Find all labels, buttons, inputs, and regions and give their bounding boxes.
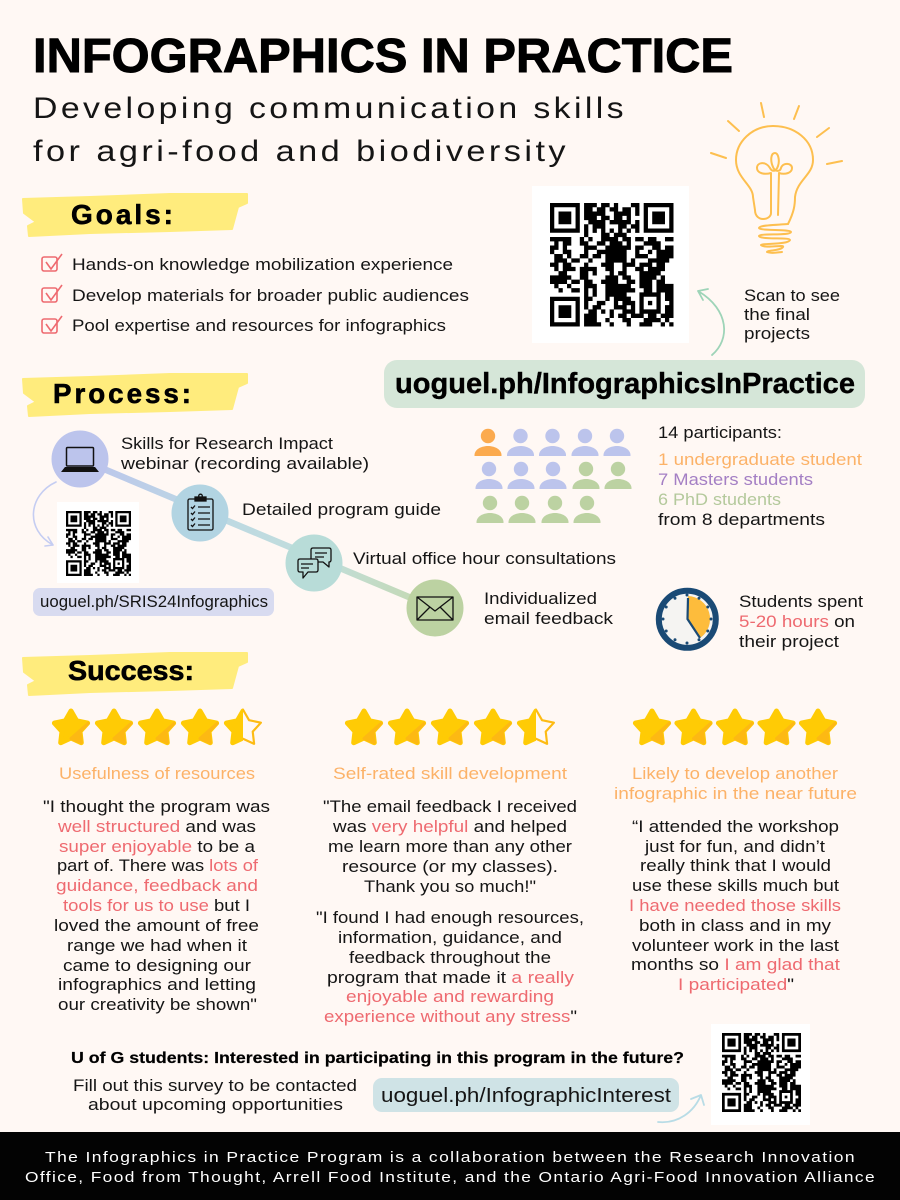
- rating: 4.5 stars: [54, 710, 261, 744]
- quote: "I thought the program was: [43, 797, 270, 816]
- quote: loved the amount of free: [54, 916, 259, 935]
- subtitle: Developing communication skills: [33, 92, 627, 125]
- QR code: final projects: [532, 186, 689, 343]
- quote 2: [316, 908, 584, 1026]
- icon: light bulb: [711, 103, 842, 253]
- quote: months so I am glad that: [631, 955, 840, 974]
- step 4: email feedback: email feedback: [484, 609, 614, 628]
- quote: guidance, feedback and: [56, 876, 258, 895]
- footer band: [0, 1132, 900, 1200]
- quote: came to designing our: [63, 956, 251, 975]
- url pill: interest survey: [373, 1078, 679, 1112]
- icon: chat bubbles: [298, 548, 331, 578]
- participant counts: [658, 423, 862, 529]
- quote 1: Thank you so much!": [364, 877, 536, 896]
- quote: I have needed those skills: [629, 896, 841, 915]
- quote: range we had when it: [67, 936, 247, 955]
- people icons: [474, 429, 632, 523]
- caption: scan to see the final projects: projects: [744, 324, 810, 343]
- time text: [739, 592, 863, 651]
- success brush highlight: [23, 653, 247, 695]
- call to action text: [73, 1076, 357, 1114]
- title: INFOGRAPHICS IN PRACTICE: [33, 30, 733, 83]
- time text: 5-20 hours on: [739, 612, 855, 631]
- quote 2: feedback throughout the: [349, 948, 551, 967]
- quote 1: was very helpful and helped: [332, 817, 567, 836]
- quote 1: "The email feedback I received: [323, 797, 577, 816]
- quote 2: "I found I had enough resources,: [316, 908, 584, 927]
- rating label: Usefulness of resources: [59, 764, 255, 783]
- quote: “I attended the workshop: [632, 817, 839, 836]
- goal 1: Hands-on knowledge mobilization experience: [72, 255, 453, 274]
- caption: scan to see the final projects: Scan to see: [744, 286, 840, 305]
- arrow: to survey QR: [658, 1095, 704, 1122]
- quote: part of. There was lots of: [57, 856, 258, 875]
- step 2: program guide: [172, 484, 441, 542]
- url pill: main: [384, 360, 865, 408]
- QR code: webinar: [57, 502, 139, 583]
- icon: clock: [659, 591, 716, 648]
- call to action text: about upcoming opportunities: [88, 1095, 343, 1114]
- quote: tools for us to use but I: [63, 896, 250, 915]
- quote 1: me learn more than any other: [328, 837, 572, 856]
- column: usefulness of resources: [43, 710, 270, 1014]
- time text: their project: [739, 632, 839, 651]
- quote: use these skills much but: [632, 876, 839, 895]
- participant counts: from 8 departments: [658, 510, 825, 529]
- time text: Students spent: [739, 592, 863, 611]
- url pill: webinar: [33, 588, 274, 616]
- rating label: Likely to develop another: [632, 764, 838, 783]
- subtitle: [33, 92, 627, 168]
- icon: clipboard: [188, 494, 213, 530]
- quote: super enjoyable to be a: [59, 837, 256, 856]
- step 2: program guide: Detailed program guide: [242, 500, 441, 519]
- step 1: webinar: Skills for Research Impact: [121, 434, 333, 453]
- heading: success: Success:: [68, 655, 194, 686]
- quote: both in class and in my: [639, 916, 832, 935]
- column: self-rated skill development: [316, 710, 584, 1026]
- step 1: webinar: [52, 430, 369, 488]
- caption: scan to see the final projects: [744, 286, 840, 343]
- participant counts: 1 undergraduate student: [658, 450, 862, 469]
- quote 2: program that made it a really: [327, 968, 575, 987]
- column: likely to develop another: [614, 711, 857, 994]
- panel: participants: [474, 423, 862, 529]
- subtitle: for agri-food and biodiversity: [33, 135, 569, 168]
- rating: 5 stars: [635, 711, 835, 743]
- panel: call to action: [71, 1024, 810, 1125]
- rating label: infographic in the near future: [614, 784, 857, 803]
- heading: goals: Goals:: [71, 199, 176, 230]
- url pill: interest survey: uoguel.ph/InfographicInterest: [381, 1085, 671, 1107]
- participant counts: 6 PhD students: [658, 490, 781, 509]
- goal 2: Develop materials for broader public audiences: [72, 286, 469, 305]
- quote: just for fun, and didn’t: [644, 837, 825, 856]
- step 4: email feedback: Individualized: [484, 589, 597, 608]
- quote: volunteer work in the last: [632, 936, 839, 955]
- quote: [43, 797, 270, 1014]
- quote 2: enjoyable and rewarding: [346, 987, 554, 1006]
- goals brush highlight: [23, 194, 247, 236]
- quote: really think that I would: [640, 856, 831, 875]
- step 3: office hours: Virtual office hour consultations: [353, 549, 616, 568]
- arrow: webinar to QR: [33, 482, 56, 546]
- process connector line: [80, 459, 435, 608]
- icon: laptop: [61, 448, 99, 472]
- panel: success: [23, 653, 857, 1026]
- panel: process: [23, 374, 616, 636]
- call to action heading: U of G students: Interested in participating in this program in the future?: [71, 1050, 684, 1067]
- rating: 4.5 stars: [347, 710, 554, 744]
- icon: envelope: [417, 597, 453, 620]
- process brush highlight: [23, 374, 247, 416]
- panel: goals: [23, 194, 469, 335]
- quote: [629, 817, 841, 994]
- footer band: Office, Food from Thought, Arrell Food Institute, and the Ontario Agri-Food Innovation Alliance: [25, 1169, 876, 1186]
- rating label: Self-rated skill development: [333, 764, 567, 783]
- caption: scan to see the final projects: the final: [744, 305, 810, 324]
- participant counts: 7 Masters students: [658, 470, 813, 489]
- arrow: to main QR: [698, 289, 724, 355]
- goal 3: Pool expertise and resources for infographics: [72, 316, 446, 335]
- panel: time spent: [659, 591, 863, 651]
- quote: infographics and letting: [58, 975, 256, 994]
- quote: our creativity be shown": [58, 995, 257, 1014]
- step 3: office hours: [286, 534, 616, 592]
- step 1: webinar: webinar (recording available): [120, 454, 369, 473]
- quote: I participated ": [678, 975, 794, 994]
- quote: well structured and was: [57, 817, 256, 836]
- url pill: main: uoguel.ph/InfographicsInPractice: [395, 368, 855, 400]
- step 4: email feedback: [406, 580, 614, 636]
- rating label: [614, 764, 857, 803]
- quote 2: experience without any stress ": [324, 1007, 577, 1026]
- quote 1: resource (or my classes).: [342, 857, 558, 876]
- url pill: webinar: uoguel.ph/SRIS24Infographics: [40, 592, 268, 611]
- heading: process: Process:: [53, 378, 194, 409]
- quote 1: [323, 797, 577, 896]
- footer band: The Infographics in Practice Program is a collaboration between the Research Innovation: [45, 1149, 856, 1166]
- call to action text: Fill out this survey to be contacted: [73, 1076, 357, 1095]
- participant counts: 14 participants:: [658, 423, 782, 442]
- quote 2: information, guidance, and: [338, 928, 562, 947]
- QR code: survey: [711, 1024, 810, 1125]
